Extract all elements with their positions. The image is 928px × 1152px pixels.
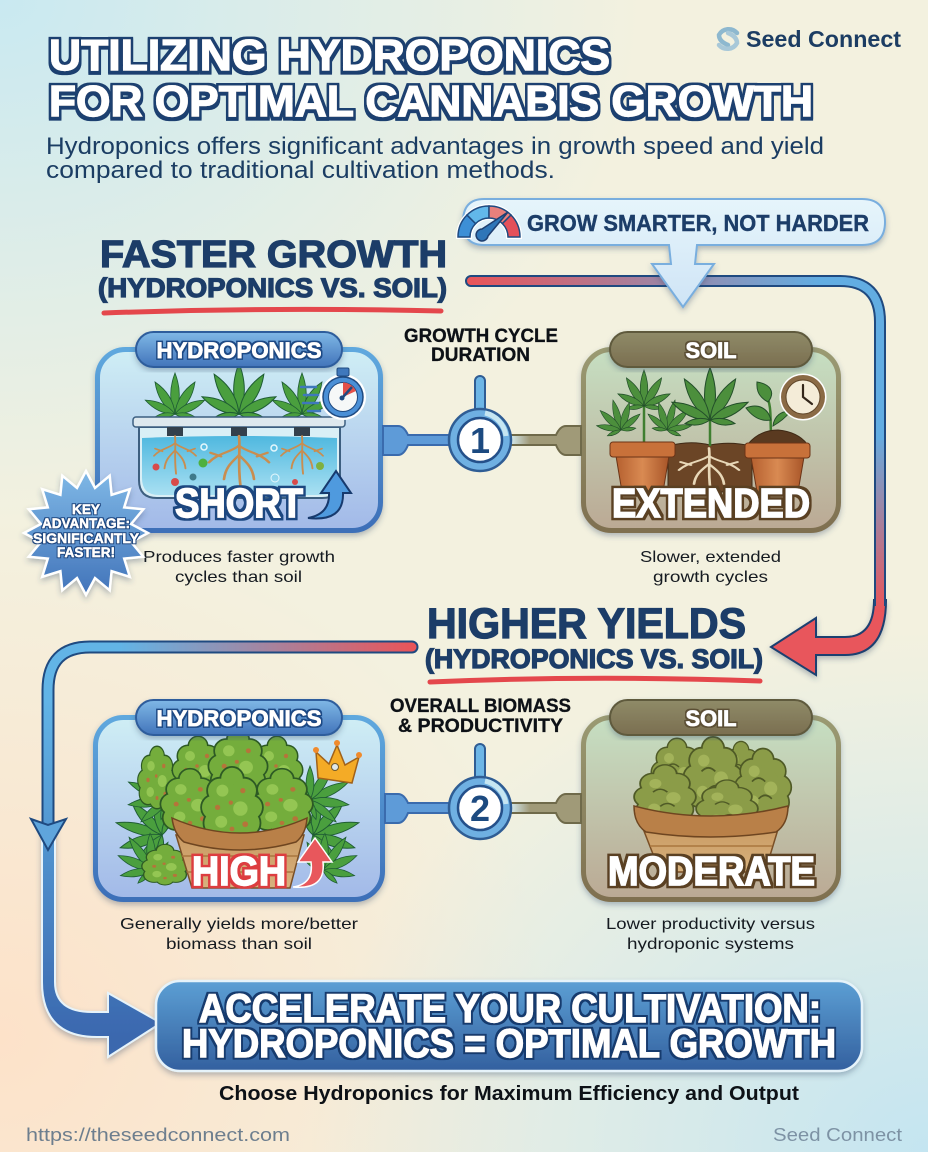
label: growth cycle duration: GROWTH CYCLE bbox=[404, 326, 558, 347]
call to action banner: HYDROPONICS = OPTIMAL GROWTH bbox=[182, 1022, 836, 1066]
heading: faster growth: (HYDROPONICS VS. SOIL) bbox=[98, 273, 447, 303]
node 2: biomass and productivity bbox=[385, 744, 581, 839]
icon: clock bbox=[780, 374, 826, 420]
icon: red up arrow bbox=[293, 838, 332, 887]
badge: key advantage bbox=[24, 471, 148, 595]
icon: crown bbox=[313, 740, 362, 783]
title bbox=[49, 31, 813, 126]
label: overall biomass and productivity bbox=[390, 696, 571, 737]
panel: hydroponics growth bbox=[98, 332, 380, 530]
heading: higher yields: (HYDROPONICS VS. SOIL) bbox=[425, 644, 763, 674]
captions: hydroponics growth: Produces faster growth bbox=[143, 549, 335, 566]
arrow: red into higher yields bbox=[771, 600, 886, 675]
heading: faster growth: FASTER GROWTH bbox=[100, 234, 447, 276]
icon: hydroponic plants bbox=[144, 363, 333, 420]
label pill: soil: SOIL bbox=[686, 706, 736, 731]
label pill: soil bbox=[610, 332, 812, 367]
badge: key advantage: ADVANTAGE: bbox=[42, 515, 130, 531]
call to action banner: ACCELERATE YOUR CULTIVATION: bbox=[199, 987, 821, 1031]
badge: key advantage: FASTER! bbox=[57, 544, 115, 560]
captions: soil yield: Lower productivity versus bbox=[606, 916, 815, 933]
icon: side leaves bbox=[104, 753, 371, 892]
arrow: into call to action bbox=[42, 825, 161, 1057]
icon: soil basket bbox=[634, 806, 788, 872]
heading: higher yields bbox=[425, 600, 763, 682]
captions: soil growth: Slower, extended bbox=[640, 549, 781, 566]
captions: soil yield bbox=[606, 916, 815, 953]
node 1: growth cycle duration bbox=[383, 376, 581, 471]
captions: soil growth: growth cycles bbox=[653, 569, 768, 586]
footer url: https://theseedconnect.com bbox=[26, 1124, 290, 1145]
captions: soil yield: hydroponic systems bbox=[627, 936, 794, 953]
label: growth cycle duration: DURATION bbox=[431, 345, 530, 366]
label: overall biomass and productivity: OVERALL BIOMASS bbox=[390, 696, 571, 717]
panel: hydroponics yield bbox=[96, 700, 382, 900]
icon: blue up arrow bbox=[308, 471, 351, 518]
captions: hydroponics yield: biomass than soil bbox=[166, 936, 312, 953]
call to action banner bbox=[156, 981, 862, 1071]
captions: hydroponics growth bbox=[143, 549, 335, 586]
tagline: Choose Hydroponics for Maximum Efficiency and Output bbox=[219, 1083, 799, 1105]
value: high: HIGH bbox=[192, 848, 286, 894]
captions: soil growth bbox=[640, 549, 781, 586]
label pill: soil: SOIL bbox=[686, 338, 736, 363]
panel: soil growth bbox=[584, 332, 838, 530]
captions: hydroponics growth: cycles than soil bbox=[175, 569, 302, 586]
icon: soil buds bbox=[635, 738, 790, 832]
captions: hydroponics yield: Generally yields more/better bbox=[120, 916, 359, 933]
subtitle: compared to traditional cultivation methods. bbox=[46, 157, 555, 184]
heading: faster growth bbox=[98, 234, 447, 313]
title: UTILIZING HYDROPONICS bbox=[49, 31, 610, 80]
value: short: SHORT bbox=[175, 480, 303, 526]
icon: gauge bbox=[458, 206, 520, 241]
icon: soil plants bbox=[590, 368, 790, 446]
subtitle: Hydroponics offers significant advantages in growth speed and yield bbox=[46, 133, 824, 160]
captions: hydroponics yield bbox=[120, 916, 359, 953]
icon: stopwatch bbox=[301, 368, 366, 420]
icon: hydroponic tank bbox=[133, 417, 345, 498]
node 2: biomass and productivity: 2 bbox=[470, 788, 490, 829]
badge: key advantage: SIGNIFICANTLY bbox=[33, 530, 140, 546]
label: growth cycle duration bbox=[404, 326, 558, 366]
value: extended: EXTENDED bbox=[612, 480, 810, 526]
logo: Seed Connect: Seed Connect bbox=[746, 26, 901, 52]
footer brand: Seed Connect bbox=[773, 1124, 902, 1145]
icon: basket bbox=[172, 818, 307, 888]
flow line: faster growth to higher yields bbox=[471, 281, 886, 675]
title: FOR OPTIMAL CANNABIS GROWTH bbox=[49, 77, 813, 126]
panel: soil yield bbox=[584, 700, 838, 900]
heading: higher yields: HIGHER YIELDS bbox=[427, 600, 746, 648]
badge: key advantage: KEY bbox=[72, 501, 101, 517]
label: overall biomass and productivity: & PRODUCTIVITY bbox=[398, 716, 563, 737]
value: moderate: MODERATE bbox=[608, 848, 815, 894]
callout text: GROW SMARTER, NOT HARDER bbox=[527, 210, 869, 236]
flow line: higher yields to call to action bbox=[31, 647, 412, 1057]
icon: pots bbox=[610, 430, 810, 492]
label pill: soil bbox=[610, 700, 812, 735]
label pill: hydroponics: HYDROPONICS bbox=[156, 706, 322, 731]
subtitle bbox=[46, 133, 824, 184]
label pill: hydroponics: HYDROPONICS bbox=[156, 338, 322, 363]
callout: grow smarter bbox=[458, 199, 885, 307]
icon: soil bed with roots bbox=[668, 443, 752, 492]
label pill: hydroponics bbox=[136, 700, 342, 735]
label pill: hydroponics bbox=[136, 332, 342, 367]
node 1: growth cycle duration: 1 bbox=[470, 420, 490, 461]
arrow: down marker bbox=[31, 819, 66, 850]
icon: hydroponic buds bbox=[138, 730, 312, 884]
